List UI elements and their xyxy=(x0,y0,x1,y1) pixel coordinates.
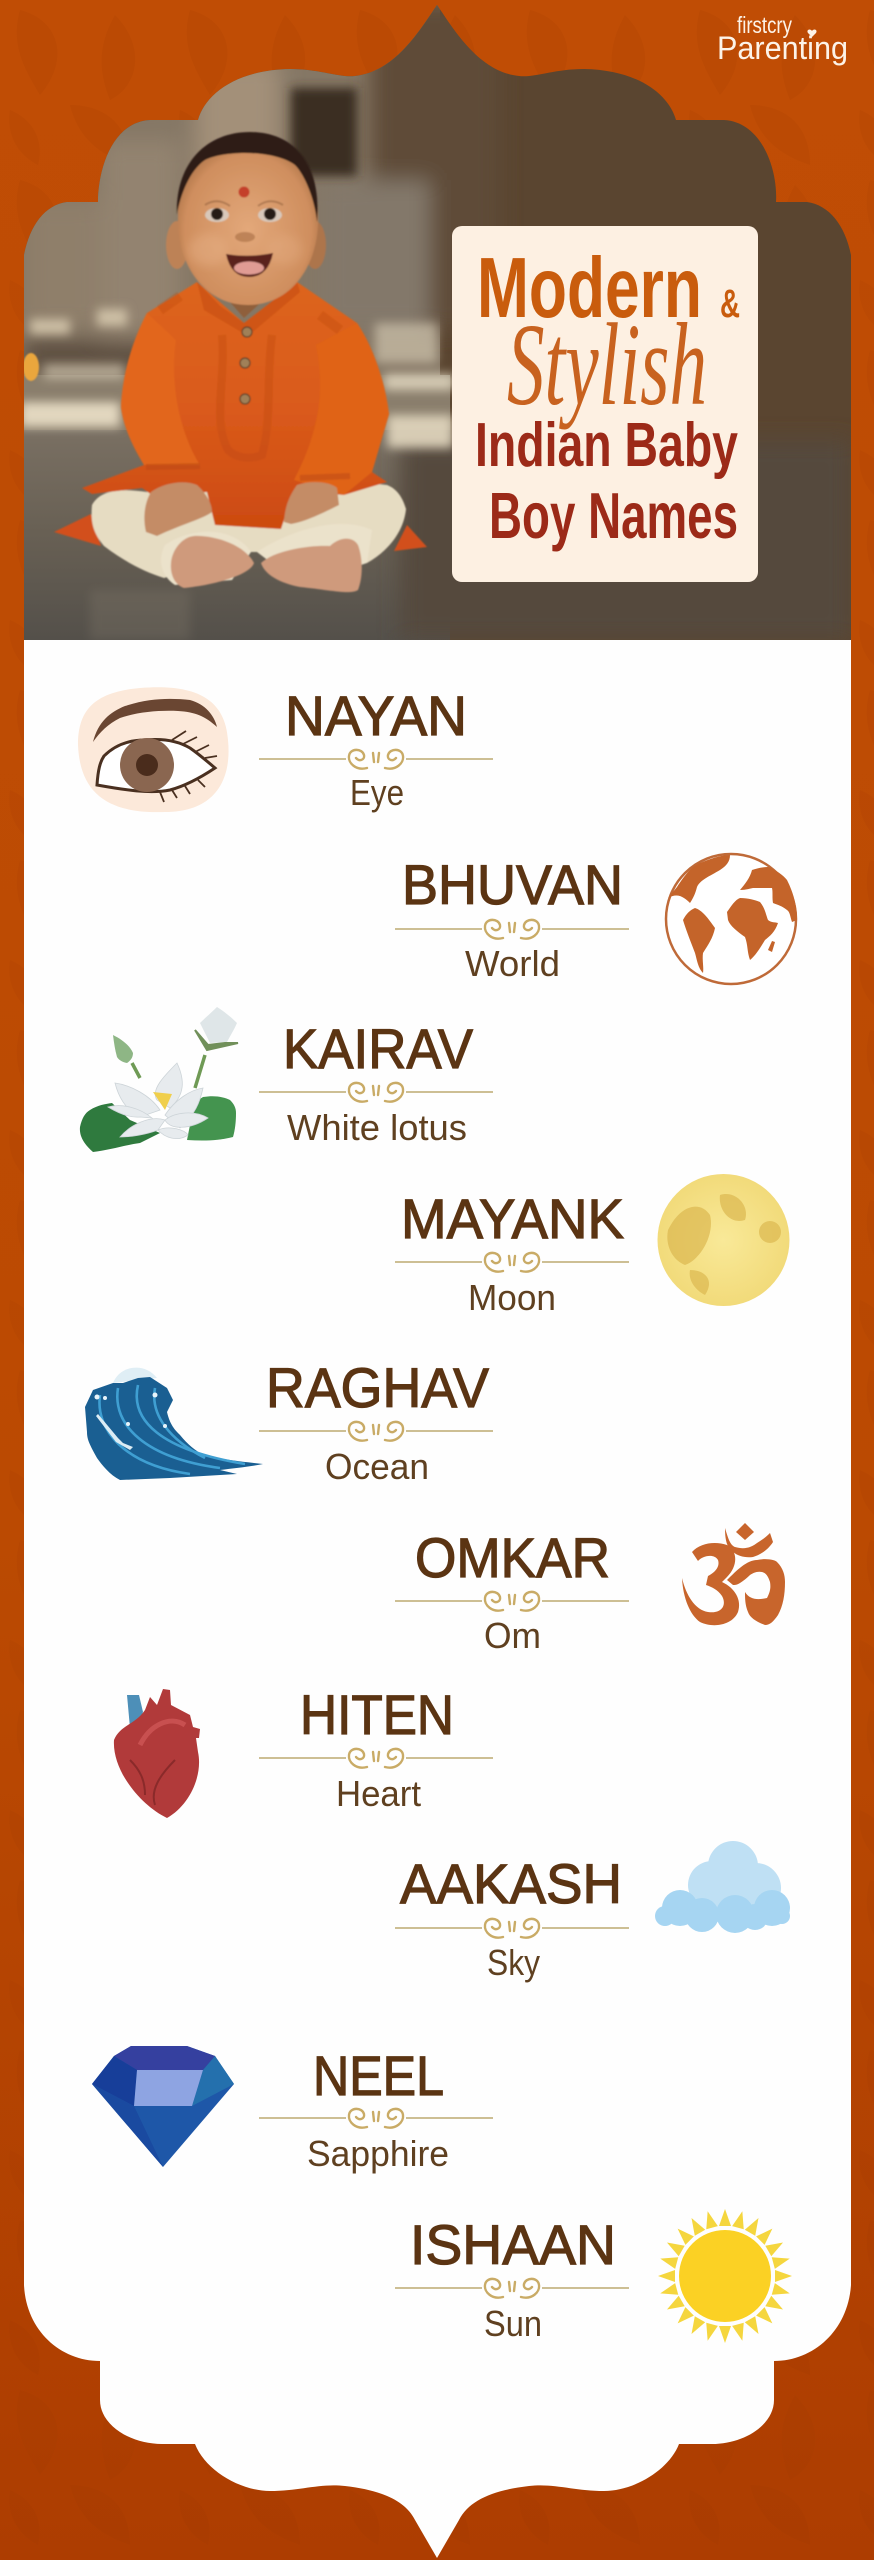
name: KAIRAV xyxy=(283,1017,474,1080)
meaning: Moon xyxy=(468,1277,556,1318)
name: ISHAAN xyxy=(410,2213,616,2276)
hero photo in arch xyxy=(0,0,874,640)
face xyxy=(178,138,318,305)
meaning: Sky xyxy=(487,1942,540,1983)
icon: cloud xyxy=(655,1841,790,1933)
bindi, eyes, nose, mouth xyxy=(238,186,250,198)
logo: Parenting xyxy=(717,30,848,66)
name: BHUVAN xyxy=(402,853,623,916)
hair xyxy=(177,132,318,222)
logo xyxy=(717,12,848,66)
meaning: Sun xyxy=(484,2303,542,2344)
name row: NAYAN xyxy=(78,684,493,813)
neck xyxy=(231,302,258,318)
name row: ISHAAN xyxy=(395,2209,792,2344)
kurta body xyxy=(82,282,389,529)
title card xyxy=(452,226,758,582)
divider xyxy=(259,1422,493,1441)
name row: BHUVAN xyxy=(395,853,797,984)
divider xyxy=(259,2109,493,2128)
icon: white lotus xyxy=(80,1007,238,1152)
name: HITEN xyxy=(300,1683,454,1746)
ears xyxy=(166,221,188,269)
icon: eye xyxy=(78,687,229,812)
icon: world globe xyxy=(666,854,797,984)
icon: sun xyxy=(658,2209,792,2343)
divider xyxy=(395,1253,629,1272)
name: OMKAR xyxy=(415,1526,610,1589)
divider xyxy=(395,2279,629,2298)
logo: firstcry xyxy=(737,12,792,38)
name row: HITEN xyxy=(114,1683,493,1818)
title line: Boy Names: Boy Names xyxy=(489,479,738,552)
meaning: Eye xyxy=(350,772,404,813)
photo background xyxy=(0,0,874,640)
baby xyxy=(54,132,427,592)
icon: moon xyxy=(658,1174,790,1306)
feet xyxy=(171,536,254,588)
name row: MAYANK xyxy=(395,1174,790,1318)
divider xyxy=(395,920,629,939)
script: Stylish: Stylish xyxy=(507,299,707,430)
divider xyxy=(259,750,493,769)
meaning: Om xyxy=(484,1615,541,1656)
divider xyxy=(259,1083,493,1102)
title line: Modern: Modern xyxy=(477,241,702,336)
meaning: World xyxy=(465,943,560,984)
icon: ocean wave xyxy=(85,1368,263,1480)
meaning: Heart xyxy=(336,1773,421,1814)
name row: AAKASH xyxy=(395,1841,790,1983)
kurta tails xyxy=(54,514,427,551)
name: NAYAN xyxy=(285,684,467,747)
ampersand: & xyxy=(720,282,740,326)
hands xyxy=(144,482,212,536)
icon: om symbol xyxy=(682,1523,785,1625)
name row: KAIRAV xyxy=(80,1007,493,1152)
name: AAKASH xyxy=(400,1852,622,1915)
meaning: Ocean xyxy=(325,1446,429,1487)
name row: NEEL xyxy=(92,2044,493,2174)
white names panel xyxy=(24,640,851,2558)
name: RAGHAV xyxy=(266,1356,490,1419)
name: MAYANK xyxy=(401,1187,624,1250)
embroidery and buttons xyxy=(146,296,350,478)
divider xyxy=(259,1749,493,1768)
meaning: White lotus xyxy=(287,1107,467,1148)
name row: RAGHAV xyxy=(85,1356,493,1487)
divider xyxy=(395,1592,629,1611)
icon: sapphire xyxy=(92,2046,234,2167)
icon: anatomical heart xyxy=(114,1689,200,1818)
divider xyxy=(395,1919,629,1938)
title line: Indian Baby: Indian Baby xyxy=(475,411,738,480)
trousers xyxy=(90,483,407,579)
name: NEEL xyxy=(313,2044,444,2107)
meaning: Sapphire xyxy=(307,2133,449,2174)
name row: OMKAR xyxy=(395,1523,785,1656)
